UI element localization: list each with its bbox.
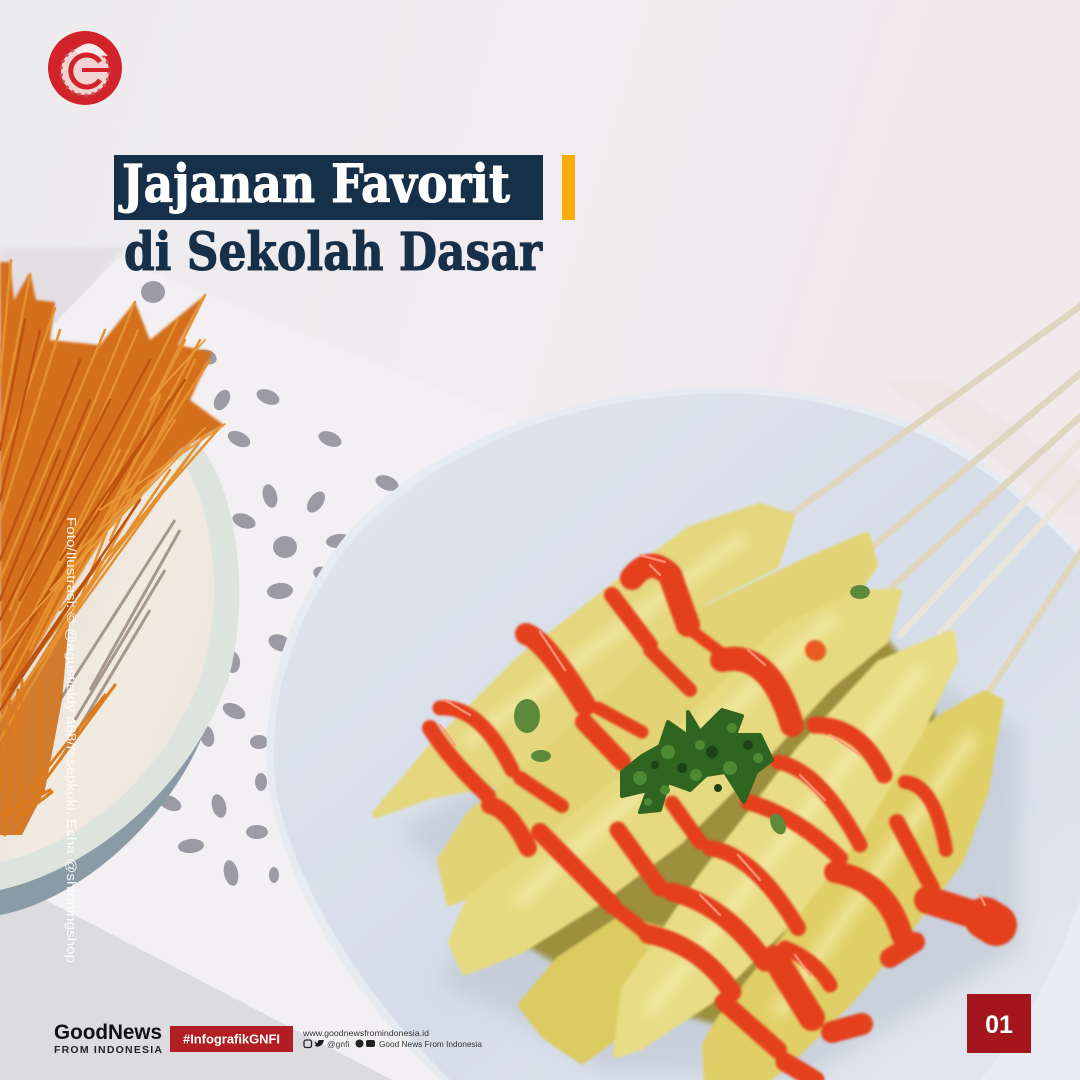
hashtag text: #InfografikGNFI: [183, 1032, 280, 1046]
title line one: Jajanan Favorit: [118, 154, 510, 215]
chili sauce drizzle: [430, 566, 996, 1080]
bowl noodle shadow: [60, 520, 180, 760]
page number badge: [967, 994, 1031, 1053]
fried skewers: [376, 507, 1000, 1080]
orange accent bar: [562, 155, 575, 220]
title line two: di Sekolah Dasar: [124, 222, 543, 283]
GoodNews wordmark: GoodNews: [54, 1021, 162, 1044]
social icons and handles: @gnfi: [327, 1039, 349, 1049]
hashtag badge: [170, 1026, 293, 1052]
title: [114, 154, 575, 283]
bamboo skewers: [790, 305, 1080, 690]
small green flecks in fritters: [514, 585, 870, 837]
From Indonesia wordmark: FROM INDONESIA: [54, 1044, 162, 1056]
title highlight bar: [114, 155, 543, 220]
sauce highlights: [440, 555, 985, 975]
pile underlay: [480, 610, 950, 1040]
white dotted board: [0, 258, 515, 1080]
logo: red garuda emblem: [48, 31, 122, 105]
social icons and handles: Good News From Indonesia: [379, 1039, 482, 1049]
bowl: [0, 340, 239, 915]
parsley garnish: [622, 710, 772, 812]
food shadow on plate: [400, 600, 1020, 1080]
page number badge: 01: [985, 1011, 1013, 1039]
plate: [267, 388, 1080, 1080]
footer brand: [54, 1021, 482, 1056]
photo credit: Foto/Ilustrasi: © @agustialdy a88/resepkoki, Echa @shinningshop: [64, 517, 79, 963]
fritter highlights: [470, 540, 970, 1010]
website address: www.goodnewsfromindonesia.id: [302, 1028, 429, 1038]
social icons and handles: [304, 1039, 482, 1049]
orange noodles: [0, 260, 225, 835]
